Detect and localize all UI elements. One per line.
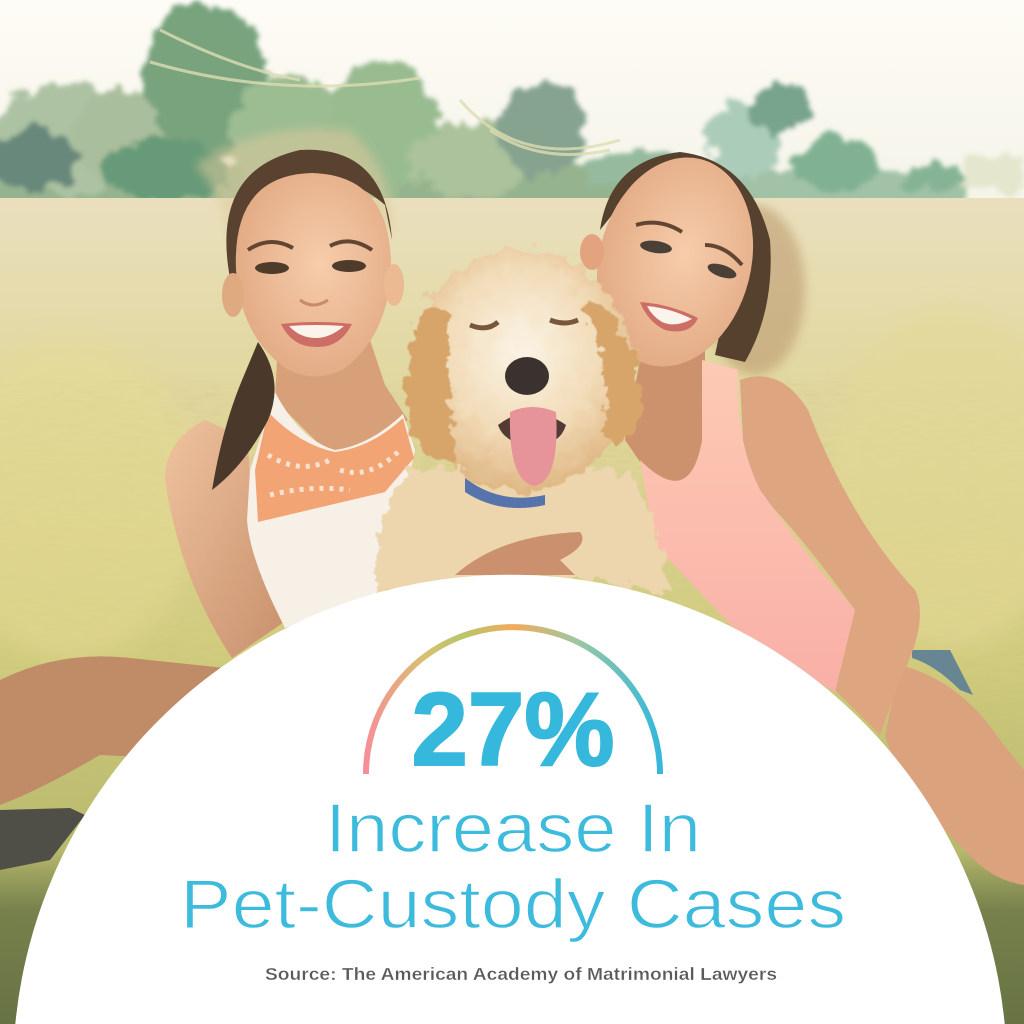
- right girl face: [576, 141, 774, 383]
- source note: Source: The American Academy of Matrimonial Lawyers: [265, 964, 777, 984]
- left girl hair halo: [195, 128, 392, 240]
- left girl nose: [300, 300, 328, 305]
- dog eyes: [470, 320, 578, 328]
- dog tongue: [510, 407, 557, 486]
- right girl eyes: [639, 239, 673, 255]
- right girl: [576, 141, 1024, 885]
- left girl face: [236, 173, 391, 376]
- left girl orange yoke: [255, 412, 414, 522]
- tree line: [0, 0, 1024, 215]
- dog head: [410, 248, 634, 492]
- white semicircle panel: [15, 575, 1005, 1024]
- power lines: [150, 30, 620, 154]
- statistic: 27%: 27%: [412, 672, 614, 788]
- left girl braid: [212, 342, 275, 490]
- heading line 2: Pet-Custody Cases: [180, 865, 846, 943]
- heading line 1: Increase In: [325, 789, 701, 867]
- left girl neck and chest: [275, 340, 408, 465]
- sky: [0, 0, 1024, 210]
- left girl arm: [165, 420, 284, 658]
- left girl: [0, 128, 415, 870]
- left girl smile: [281, 322, 352, 347]
- left girl hair: [226, 150, 392, 285]
- left girl white top: [247, 392, 415, 628]
- left girl eyes: [255, 262, 289, 274]
- right girl smile: [640, 302, 698, 332]
- dog body: [376, 470, 672, 595]
- dog ears: [406, 305, 455, 462]
- dog collar: [465, 478, 545, 508]
- right girl pink top: [640, 360, 855, 692]
- heading: [180, 789, 846, 943]
- right girl arm: [740, 376, 920, 735]
- grass texture: [0, 380, 1024, 1024]
- right girl chest: [625, 340, 705, 520]
- darker grass, lower right: [960, 850, 1024, 1024]
- right girl hair halo: [705, 205, 805, 375]
- left girl legs: [0, 656, 225, 805]
- gradient gauge arc: [366, 627, 660, 774]
- left girl yoke embroidery: [268, 450, 400, 495]
- right girl leg: [885, 665, 1024, 885]
- dog nose: [505, 357, 549, 395]
- darker grass, lower left: [0, 850, 90, 1024]
- dog: [376, 248, 672, 595]
- right girl shorts: [912, 650, 973, 695]
- right girl hair: [600, 152, 771, 362]
- dog mouth: [498, 412, 566, 445]
- left girl hand on dog: [455, 532, 582, 575]
